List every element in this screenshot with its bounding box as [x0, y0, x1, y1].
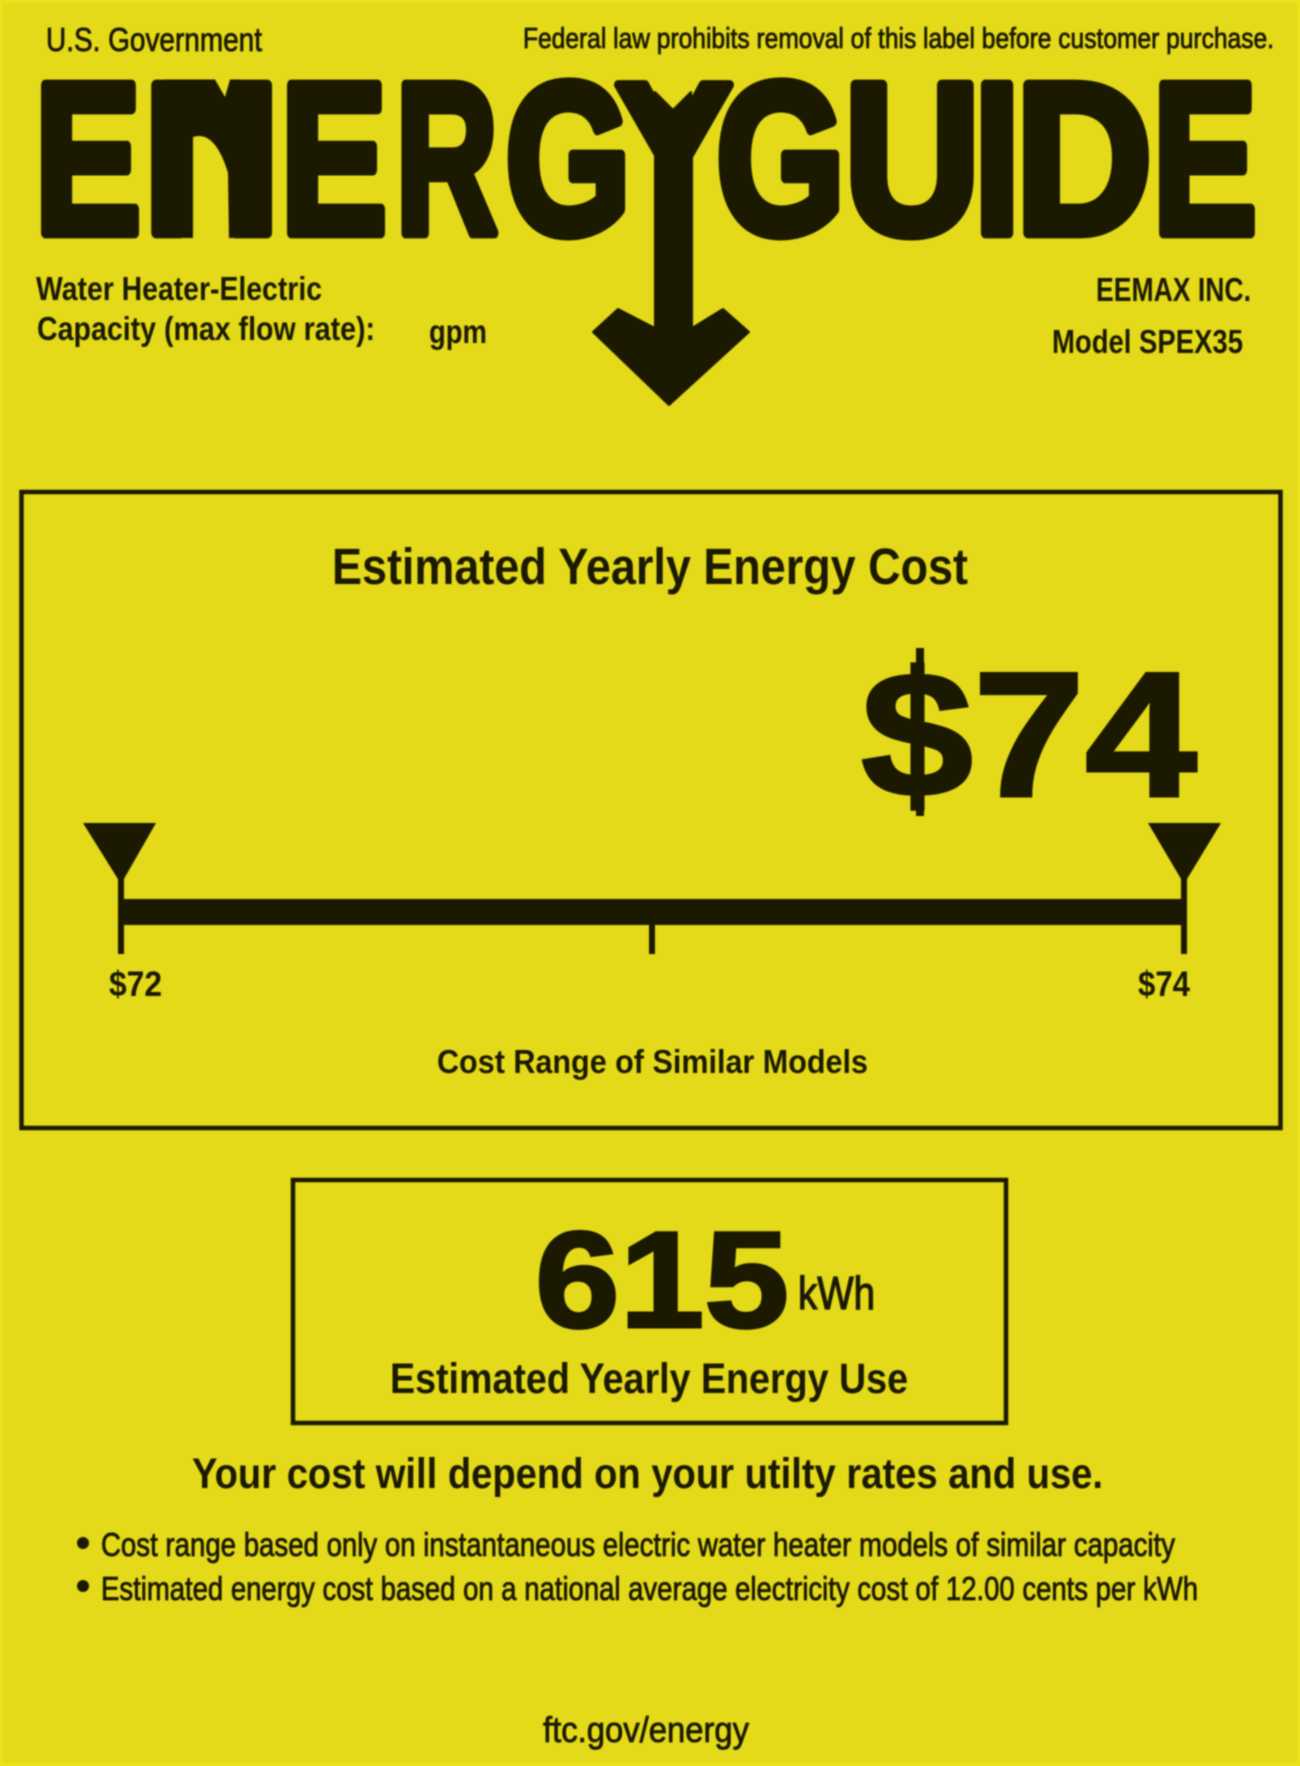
- cost heading: Estimated Yearly Energy Cost: [332, 538, 968, 595]
- title: EnergyGuide logotype: U: [844, 39, 981, 279]
- low value: $72: [109, 965, 162, 1004]
- panel: estimated yearly energy use: [293, 1180, 1006, 1423]
- bullet list: [77, 1526, 1198, 1607]
- cost note: Your cost will depend on your utilty rates and use.: [192, 1450, 1103, 1498]
- title: EnergyGuide logotype: E: [34, 39, 141, 279]
- title: EnergyGuide logotype: D: [1015, 39, 1152, 279]
- manufacturer: EEMAX INC.: [1096, 271, 1251, 308]
- cost value: $74: [861, 635, 1197, 834]
- panel: estimated yearly energy cost: [22, 492, 1280, 1128]
- product type: Water Heater-Electric: [36, 270, 322, 307]
- title: EnergyGuide logotype: N: [143, 39, 280, 279]
- range scale: [118, 875, 1187, 954]
- energy value: 615: [535, 1204, 789, 1357]
- title: EnergyGuide logotype: I: [974, 38, 1020, 279]
- arrow: logotype down arrow: [593, 92, 749, 405]
- title: EnergyGuide logotype: Y: [615, 46, 732, 252]
- energy unit: kWh: [798, 1267, 875, 1319]
- title: EnergyGuide logotype: G: [716, 38, 845, 279]
- marker: high end: [1148, 823, 1221, 884]
- title: EnergyGuide logotype: E: [280, 39, 387, 279]
- title: EnergyGuide logotype: R: [396, 38, 498, 279]
- high value: $74: [1138, 965, 1190, 1004]
- energy caption: Estimated Yearly Energy Use: [390, 1355, 908, 1403]
- title: EnergyGuide logotype: [34, 38, 1257, 279]
- marker: low end: [83, 823, 156, 884]
- model number: Model SPEX35: [1052, 323, 1243, 360]
- footer url: ftc.gov/energy: [543, 1709, 749, 1750]
- title: EnergyGuide logotype: G: [505, 40, 631, 279]
- header: government text: U.S. Government: [46, 21, 262, 58]
- capacity label: Capacity (max flow rate):: [37, 310, 375, 347]
- capacity unit: gpm: [429, 313, 487, 350]
- title: EnergyGuide logotype: E: [1152, 39, 1257, 279]
- range caption: Cost Range of Similar Models: [437, 1043, 868, 1080]
